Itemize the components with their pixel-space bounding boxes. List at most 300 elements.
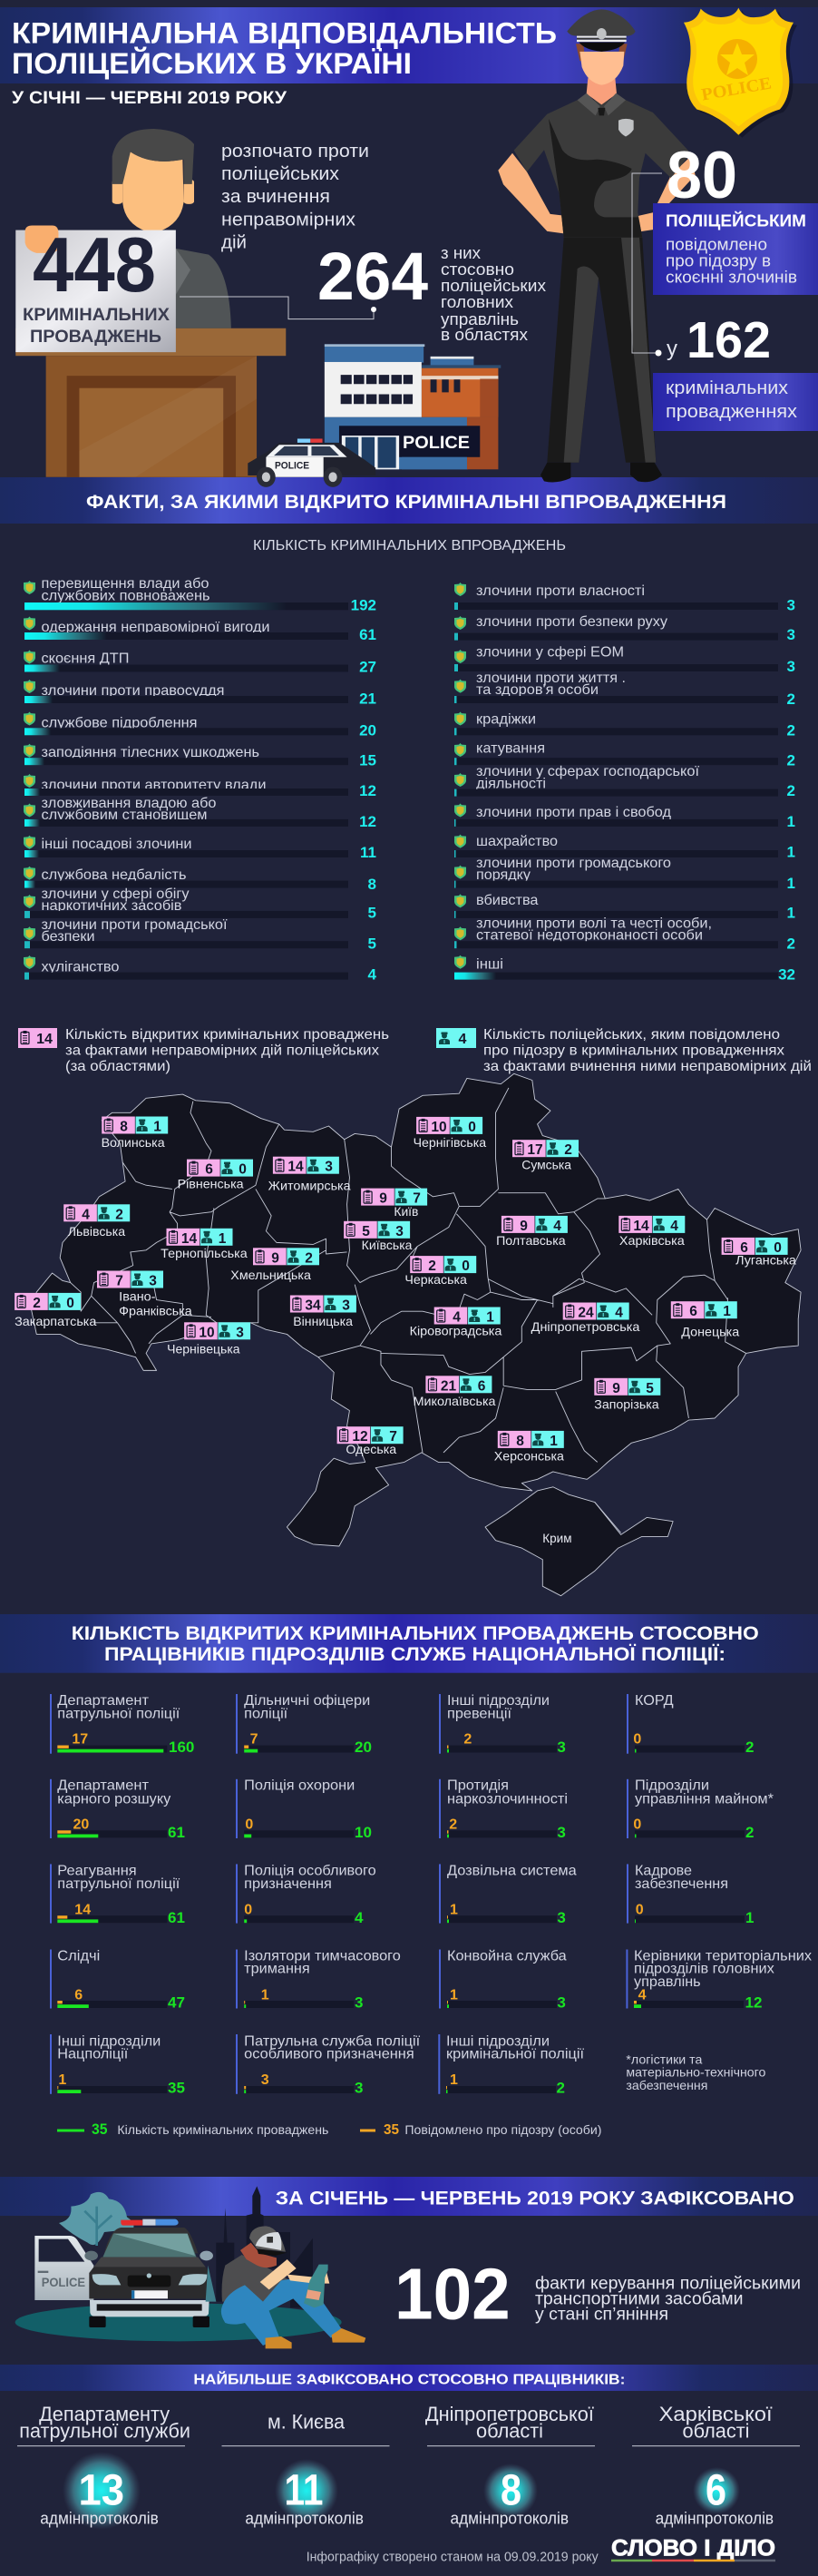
region: Рівненська: Рівненська <box>178 1177 244 1191</box>
unit: Поліція охорони: 0 <box>245 1817 253 1833</box>
row 5 public safety <box>24 917 376 952</box>
unit: Інші підрозділи кримінальної поліції <box>438 2033 585 2096</box>
region: Харківська: Харківська <box>619 1233 685 1248</box>
stat: Дніпропетровської області: області <box>476 2420 543 2443</box>
unit: КОРД: 0 <box>633 1732 641 1748</box>
unit: Слідчі: Слідчі <box>57 1948 100 1964</box>
connector 80 to 162 <box>632 173 662 356</box>
region: Житомирська: 14 <box>287 1160 304 1175</box>
unit: Поліція особливого призначення: 0 <box>244 1903 252 1918</box>
legend: suspects: Повідомлено про підозру (особи) <box>404 2122 601 2137</box>
unit: Ізолятори тимчасового тримання: 3 <box>355 1994 363 2011</box>
car label POLICE: POLICE <box>275 461 309 472</box>
region: Сумська: 17 <box>527 1142 543 1158</box>
unit: Патрульна служба поліції особливого призначення: особливого призначення <box>244 2047 414 2062</box>
unit: Конвойна служба: 3 <box>557 1994 566 2011</box>
region: Житомирська: Житомирська <box>268 1178 351 1192</box>
region: Херсонська: 8 <box>516 1434 524 1449</box>
region: Донецька: Донецька <box>681 1325 739 1339</box>
row life <box>454 671 795 708</box>
unit: Поліція особливого призначення <box>236 1864 376 1926</box>
row theft <box>454 711 795 739</box>
region: Миколаївська <box>414 1376 496 1408</box>
unit: Дозвільна система: Дозвільна система <box>447 1864 577 1878</box>
region: Хмельницька: Хмельницька <box>230 1268 311 1282</box>
unit: Інші підрозділи кримінальної поліції: Інші підрозділи <box>446 2033 550 2049</box>
subtitle: У СІЧНІ — ЧЕРВНІ 2019 РОКУ <box>12 88 287 108</box>
region: Сумська: Сумська <box>521 1158 571 1172</box>
row 8 <box>24 867 376 893</box>
panel: 80 police officers: ПОЛІЦЕЙСЬКИМ <box>666 211 806 230</box>
unit: Протидія наркозлочинності <box>439 1778 568 1841</box>
region: Хмельницька: 9 <box>271 1250 279 1266</box>
region: Чернігівська: 0 <box>468 1120 476 1135</box>
legend: proceedings: Кількість кримінальних проваджень <box>117 2122 328 2137</box>
unit: Протидія наркозлочинності: 3 <box>557 1824 566 1841</box>
map legend: suspects: про підозру в кримінальних провадженнях <box>483 1043 784 1058</box>
text: opened against police: поліцейських <box>221 164 339 184</box>
text: opened against police: розпочато проти <box>221 142 369 162</box>
footnote: забезпечення <box>626 2078 707 2092</box>
heading: facts: ФАКТИ, ЗА ЯКИМИ ВІДКРИТО КРИМІНАЛЬНІ ВПРОВАДЖЕННЯ <box>86 492 726 513</box>
unit: Керівники територіальних підрозділів: Керівники територіальних <box>634 1948 812 1964</box>
band: police units: ПРАЦІВНИКІВ ПІДРОЗДІЛІВ СЛУЖБ НАЦІОНАЛЬНОЇ ПОЛІЦІЇ: <box>104 1643 725 1665</box>
unit: Ізолятори тимчасового тримання: Ізолятори тимчасового <box>244 1948 401 1964</box>
region: Запорізька <box>594 1378 660 1412</box>
row 21: 21 <box>359 690 376 707</box>
region: Волинська <box>102 1116 168 1150</box>
row torture: 2 <box>787 751 795 769</box>
region: Хмельницька <box>230 1248 319 1282</box>
title <box>12 17 557 80</box>
bar chart: left column <box>24 576 377 983</box>
stat: м. Києва <box>221 2411 390 2528</box>
unit: Ізолятори тимчасового тримання: 1 <box>261 1987 269 2003</box>
row 8: 8 <box>368 876 376 893</box>
map legend: proceedings: (за областями) <box>65 1059 170 1074</box>
unit: Департамент патрульної поліції: патрульної поліції <box>57 1706 180 1721</box>
band: most recorded <box>0 2365 818 2391</box>
region: Харківська: 4 <box>670 1219 678 1234</box>
unit: Керівники територіальних підрозділів: 4 <box>638 1987 647 2003</box>
region: Запорізька: 5 <box>646 1381 654 1396</box>
row other <box>454 955 795 984</box>
number 448 sign <box>23 222 170 347</box>
region: Миколаївська: 21 <box>441 1378 456 1394</box>
row 5 drugs: 5 <box>368 904 376 921</box>
unit: Кадрове забезпечення <box>627 1864 754 1926</box>
unit: Реагування патрульної поліції: Реагування <box>57 1864 137 1878</box>
stat: Департаменту патрульної служби <box>17 2403 190 2530</box>
row property: злочини проти власності <box>476 583 645 599</box>
region: Черкаська: 2 <box>428 1259 436 1274</box>
unit: Департамент карного розшуку: карного розшуку <box>57 1791 170 1807</box>
unit: Підрозділи управління майном: управління майном* <box>635 1791 774 1807</box>
illustration: police car and drunk man <box>15 2186 365 2348</box>
stat: Дніпропетровської області: 8 <box>501 2467 521 2515</box>
region: Львівська: Львівська <box>68 1224 125 1239</box>
region: Житомирська <box>268 1157 351 1192</box>
stat: м. Києва: м. Києва <box>268 2411 346 2434</box>
unit: Реагування патрульної поліції <box>50 1864 185 1926</box>
unit: Кадрове забезпечення: 0 <box>636 1903 644 1918</box>
map of Ukraine <box>32 1073 801 1596</box>
row public order: злочини проти громадського <box>476 856 671 871</box>
number 448 sign: 448 <box>33 222 156 309</box>
unit: Патрульна служба поліції особливого призначення: 3 <box>355 2080 363 2096</box>
region: Закарпатська <box>15 1293 97 1328</box>
unit: Дільничні офіцери: 20 <box>355 1739 372 1756</box>
region: Чернівецька: 3 <box>236 1325 244 1340</box>
row 12 authority <box>24 774 376 799</box>
region: Чернігівська: Чернігівська <box>414 1135 486 1150</box>
region: Київ: 7 <box>413 1191 421 1207</box>
unit: КОРД <box>627 1693 754 1756</box>
subheading: КІЛЬКІСТЬ КРИМІНАЛЬНИХ ВПРОВАДЖЕНЬ <box>253 538 566 553</box>
row murder: вбивства <box>476 893 539 908</box>
region: Полтавська: 4 <box>553 1219 561 1234</box>
region: Дніпропетровська: Дніпропетровська <box>531 1319 640 1334</box>
region: Харківська: 14 <box>633 1219 649 1234</box>
credit text: Інфографіку створено станом на 09.09.2019 року <box>307 2551 599 2565</box>
row economy: діяльності <box>476 777 546 791</box>
region: Волинська: 1 <box>153 1120 161 1134</box>
panel: 80 police officers <box>653 203 818 295</box>
panel: 80 police officers: повідомлено <box>666 236 767 254</box>
unit: Підрозділи управління майном: 0 <box>633 1817 641 1833</box>
region: Житомирська: 3 <box>325 1160 333 1175</box>
row fraud <box>454 834 795 861</box>
bar chart: right column <box>454 583 795 984</box>
region: Дніпропетровська: 24 <box>578 1305 594 1321</box>
panel: 162 criminal proceedings: кримінальних <box>666 378 788 398</box>
row 20: 20 <box>359 721 376 739</box>
panel: 80 police officers: скоєнні злочинів <box>666 269 797 287</box>
region: Полтавська <box>496 1216 568 1248</box>
region: Львівська: 4 <box>82 1207 90 1222</box>
row fraud: шахрайство <box>476 834 558 849</box>
row traffic: 3 <box>787 626 795 643</box>
region: Кіровоградська: Кіровоградська <box>410 1324 502 1338</box>
row computers: 3 <box>787 658 795 675</box>
region: Крим: Крим <box>542 1531 571 1545</box>
number 448 sign: КРИМІНАЛЬНИХ <box>23 306 170 325</box>
row 5 drugs <box>24 886 376 921</box>
unit: Ізолятори тимчасового тримання <box>236 1948 401 2011</box>
unit: Протидія наркозлочинності: наркозлочинності <box>447 1791 568 1807</box>
text: drunk driving facts: транспортними засобами <box>535 2290 744 2309</box>
row 5 public safety: злочини проти громадської <box>42 917 228 933</box>
row economy: злочини у сферах господарської <box>476 764 700 779</box>
unit: Патрульна служба поліції особливого призначення: 3 <box>261 2072 269 2088</box>
row freedom <box>454 916 795 952</box>
text: of them: стосовно <box>441 260 514 279</box>
region: Харківська <box>618 1216 685 1248</box>
row 192 <box>24 576 376 613</box>
unit: Інші підрозділи Нацполіції: Нацполіції <box>57 2047 129 2062</box>
header band <box>0 7 818 83</box>
icon: gold police badge <box>684 8 797 138</box>
row life: та здоров'я особи <box>476 682 599 698</box>
row 15: 15 <box>359 751 376 769</box>
text: of them: головних <box>441 293 513 311</box>
region: Тернопільська: 14 <box>181 1231 197 1247</box>
row 12 abuse: 12 <box>359 813 376 830</box>
row life: 2 <box>787 691 795 708</box>
unit: Поліція охорони: 10 <box>355 1824 372 1841</box>
row computers: злочини у сфері ЕОМ <box>476 644 624 661</box>
region: Херсонська: 1 <box>550 1434 558 1449</box>
region: Київська: 3 <box>395 1224 404 1239</box>
unit: Дільничні офіцери: Дільничні офіцери <box>244 1693 370 1709</box>
unit: Поліція особливого призначення: призначення <box>244 1876 332 1892</box>
unit: Інші підрозділи Нацполіції: 35 <box>168 2080 185 2096</box>
row theft: крадіжки <box>476 711 536 728</box>
stat: Департаменту патрульної служби: 13 <box>78 2467 124 2515</box>
panel: 162 criminal proceedings: провадженнях <box>666 402 797 422</box>
unit: Інші підрозділи кримінальної поліції: кримінальної поліції <box>446 2047 585 2062</box>
title: ПОЛІЦЕЙСЬКИХ В УКРАЇНІ <box>12 47 412 80</box>
region: Закарпатська: Закарпатська <box>15 1314 97 1328</box>
row 8: службова недбалість <box>42 867 187 883</box>
row freedom: 2 <box>787 935 795 952</box>
region: Полтавська: Полтавська <box>496 1233 566 1248</box>
region: Луганська <box>722 1238 796 1267</box>
region: Вінницька: 34 <box>305 1298 321 1314</box>
unit: Департамент карного розшуку: 61 <box>168 1824 185 1841</box>
unit: Департамент карного розшуку: 20 <box>73 1817 89 1833</box>
region: Луганська: 0 <box>774 1240 782 1256</box>
footnote: матеріально-технічного <box>626 2065 766 2080</box>
unit: Протидія наркозлочинності: Протидія <box>447 1778 509 1794</box>
region: Рівненська <box>178 1160 253 1191</box>
row 12 authority: злочини проти авторитету влади <box>42 778 267 793</box>
region: Київ: Київ <box>394 1204 418 1219</box>
row 4: 4 <box>368 965 377 983</box>
text: opened against police: за вчинення <box>221 187 330 207</box>
region: Кіровоградська: 4 <box>453 1310 461 1325</box>
unit: Дозвільна система: 3 <box>557 1909 566 1926</box>
region: Одеська <box>337 1426 404 1456</box>
logo: СЛОВО І ДІЛО <box>611 2536 775 2561</box>
row 20 <box>24 711 376 739</box>
stat: Департаменту патрульної служби: патрульної служби <box>19 2420 190 2443</box>
region: Закарпатська: 0 <box>66 1296 74 1311</box>
illustration: policeman <box>498 9 696 483</box>
unit: Інші підрозділи Нацполіції: 1 <box>58 2072 66 2088</box>
region: Запорізька: Запорізька <box>594 1397 659 1412</box>
connector 448 to 264 <box>180 297 376 319</box>
map legend: proceedings <box>18 1027 389 1074</box>
region: Тернопільська <box>161 1229 248 1260</box>
text: drunk driving facts: факти керування поліцейськими <box>535 2275 801 2294</box>
unit: Поліція охорони <box>236 1778 372 1841</box>
unit: Інші підрозділи превенції: 2 <box>463 1732 472 1748</box>
row 192: службових повноважень <box>42 589 210 604</box>
number 162: 162 <box>687 311 771 369</box>
region: Дніпропетровська <box>531 1303 640 1334</box>
region: Миколаївська: Миколаївська <box>414 1394 496 1408</box>
row 20: службове підроблення <box>42 716 198 731</box>
unit: Патрульна служба поліції особливого призначення: Патрульна служба поліції <box>244 2033 421 2049</box>
row rights <box>454 804 795 830</box>
row 11: 11 <box>360 844 376 861</box>
unit: Дозвільна система: 1 <box>450 1903 458 1918</box>
text: of them: управлінь <box>441 310 519 328</box>
row 11: інші посадові злочини <box>42 837 191 852</box>
row freedom: злочини проти волі та честі особи, <box>476 916 712 931</box>
region: Донецька: 1 <box>723 1304 731 1319</box>
unit: Інші підрозділи превенції: 3 <box>557 1739 566 1756</box>
row murder: 1 <box>787 904 795 921</box>
region: Херсонська: Херсонська <box>494 1448 564 1463</box>
row 12 authority: 12 <box>359 782 376 799</box>
region: Київська: 5 <box>362 1224 370 1239</box>
text: drunk driving facts <box>535 2275 801 2325</box>
row 27: 27 <box>359 659 376 675</box>
region: Запорізька: 9 <box>612 1381 620 1396</box>
region: Донецька <box>671 1301 739 1339</box>
region: Київ: 9 <box>379 1191 387 1207</box>
unit: Департамент патрульної поліції: 160 <box>169 1739 194 1756</box>
region: Хмельницька: 2 <box>305 1250 313 1266</box>
unit: Керівники територіальних підрозділів: 12 <box>745 1994 762 2011</box>
unit: Кадрове забезпечення: Кадрове <box>635 1864 692 1878</box>
row 27: скоєння ДТП <box>42 651 129 667</box>
unit: Інші підрозділи кримінальної поліції: 2 <box>557 2080 565 2096</box>
row 15: заподіяння тілесних ушкоджень <box>42 745 259 760</box>
row 61: 61 <box>359 626 376 643</box>
stat: Департаменту патрульної служби: адмінпротоколів <box>40 2510 159 2528</box>
footnote <box>626 2052 766 2092</box>
row 4 <box>24 955 377 983</box>
band: police units <box>0 1614 818 1673</box>
row property: 3 <box>787 596 795 613</box>
region: Рівненська: 0 <box>239 1162 247 1178</box>
row public order <box>454 856 795 892</box>
map legend: suspects: Кількість поліцейських, яким повідомлено <box>483 1027 780 1043</box>
number 80: 80 <box>667 139 737 212</box>
unit: Підрозділи управління майном <box>627 1778 774 1841</box>
building sign POLICE: POLICE <box>403 434 470 453</box>
stat: Дніпропетровської області: адмінпротоколів <box>450 2510 569 2528</box>
footnote: *логістики та <box>626 2052 703 2066</box>
stat: Харківської області: 6 <box>706 2467 726 2515</box>
row torture: катування <box>476 741 545 757</box>
row economy <box>454 764 795 799</box>
region: Вінницька: 3 <box>342 1298 350 1314</box>
row life: злочини проти життя . <box>476 671 626 686</box>
region: Одеська: Одеська <box>346 1442 396 1456</box>
stat: Харківської області: Харківської <box>659 2403 773 2425</box>
row 12 abuse: зловживання владою або <box>42 796 217 811</box>
unit: Слідчі: 47 <box>168 1994 185 2011</box>
unit: Інші підрозділи кримінальної поліції: 1 <box>450 2072 458 2088</box>
region: Івано-Франківська: 7 <box>115 1274 123 1288</box>
region: Київ <box>361 1189 427 1219</box>
row traffic <box>454 614 795 643</box>
unit: Дільничні офіцери: 7 <box>250 1732 258 1748</box>
region: Київська: Київська <box>362 1238 413 1252</box>
region: Донецька: 6 <box>689 1304 697 1319</box>
unit: Департамент патрульної поліції: 17 <box>72 1732 88 1748</box>
map legend: suspects: 4 <box>459 1032 467 1047</box>
band: most recorded: НАЙБІЛЬШЕ ЗАФІКСОВАНО СТОСОВНО ПРАЦІВНИКІВ: <box>193 2370 625 2387</box>
stat: Дніпропетровської області <box>425 2403 595 2528</box>
text: opened against police: неправомірних <box>221 211 355 230</box>
row 12 abuse <box>24 796 376 830</box>
region: Чернігівська: 10 <box>431 1120 447 1135</box>
region: Вінницька: Вінницька <box>293 1314 353 1328</box>
region: Луганська: 6 <box>740 1240 748 1256</box>
unit: Інші підрозділи Нацполіції: Інші підрозділи <box>57 2033 161 2049</box>
region: Черкаська <box>404 1256 476 1287</box>
text: opened against police: дій <box>221 232 247 252</box>
row rights: злочини проти прав і свобод <box>476 805 672 820</box>
text: drunk driving facts: у стані сп’яніння <box>535 2306 668 2325</box>
region: Львівська: 2 <box>115 1207 123 1222</box>
map legend: proceedings: 14 <box>36 1032 53 1047</box>
row 61 <box>24 617 376 643</box>
row 192: 192 <box>351 596 376 613</box>
stat: Департаменту патрульної служби: Департаменту <box>39 2403 170 2425</box>
unit: Поліція особливого призначення: Поліція особливого <box>244 1864 376 1878</box>
text: of them: в областях <box>441 326 528 344</box>
row fraud: 1 <box>787 844 795 861</box>
band: drunk driving <box>0 2177 818 2216</box>
row 21: злочини проти правосуддя <box>42 683 225 699</box>
text: of them: з них <box>441 244 481 262</box>
number 448 sign: ПРОВАДЖЕНЬ <box>30 328 161 347</box>
region: Одеська: 7 <box>389 1429 397 1445</box>
map legend: suspects: за фактами вчинення ними неправомірних дій <box>483 1059 812 1074</box>
unit: Конвойна служба: 1 <box>450 1987 458 2003</box>
unit: Дільничні офіцери: поліції <box>244 1706 288 1721</box>
row public order: порядку <box>476 867 531 883</box>
unit: Дільничні офіцери <box>236 1693 372 1756</box>
row 5 drugs: наркотичних засобів <box>42 898 181 914</box>
row computers <box>454 644 795 675</box>
region: Черкаська: 0 <box>462 1259 470 1274</box>
unit: Інші підрозділи превенції: Інші підрозділи <box>447 1693 550 1709</box>
stat: м. Києва: 11 <box>285 2467 323 2515</box>
row 12 abuse: службовим становищем <box>42 808 207 823</box>
unit: Підрозділи управління майном: 2 <box>745 1824 754 1841</box>
unit: Слідчі: 6 <box>74 1987 83 2003</box>
region: Чернівецька <box>167 1322 250 1356</box>
row other: інші <box>476 956 503 973</box>
region: Чернівецька: Чернівецька <box>167 1341 240 1356</box>
unit: КОРД: 2 <box>745 1739 754 1756</box>
legend: proceedings: 35 <box>92 2121 107 2138</box>
text: of them <box>441 244 546 344</box>
unit: Кадрове забезпечення: забезпечення <box>635 1876 728 1892</box>
row 5 drugs: злочини у сфері обігу <box>42 886 189 902</box>
heading: recorded: ЗА СІЧЕНЬ — ЧЕРВЕНЬ 2019 РОКУ ЗАФІКСОВАНО <box>276 2188 794 2209</box>
unit: Реагування патрульної поліції: 14 <box>74 1903 91 1918</box>
row rights: 1 <box>787 813 795 830</box>
row 11 <box>24 836 376 861</box>
unit: Керівники територіальних підрозділів <box>626 1948 812 2011</box>
illustration: police building and car <box>248 344 501 487</box>
illustration: man behind podium <box>15 129 286 477</box>
row traffic: злочини проти безпеки руху <box>476 614 667 630</box>
unit: Реагування патрульної поліції: 61 <box>168 1909 185 1926</box>
region: Івано-Франківська: Франківська <box>119 1303 192 1317</box>
region: Київська <box>344 1221 413 1252</box>
number 162: у <box>667 337 677 361</box>
row economy: 2 <box>787 782 795 799</box>
